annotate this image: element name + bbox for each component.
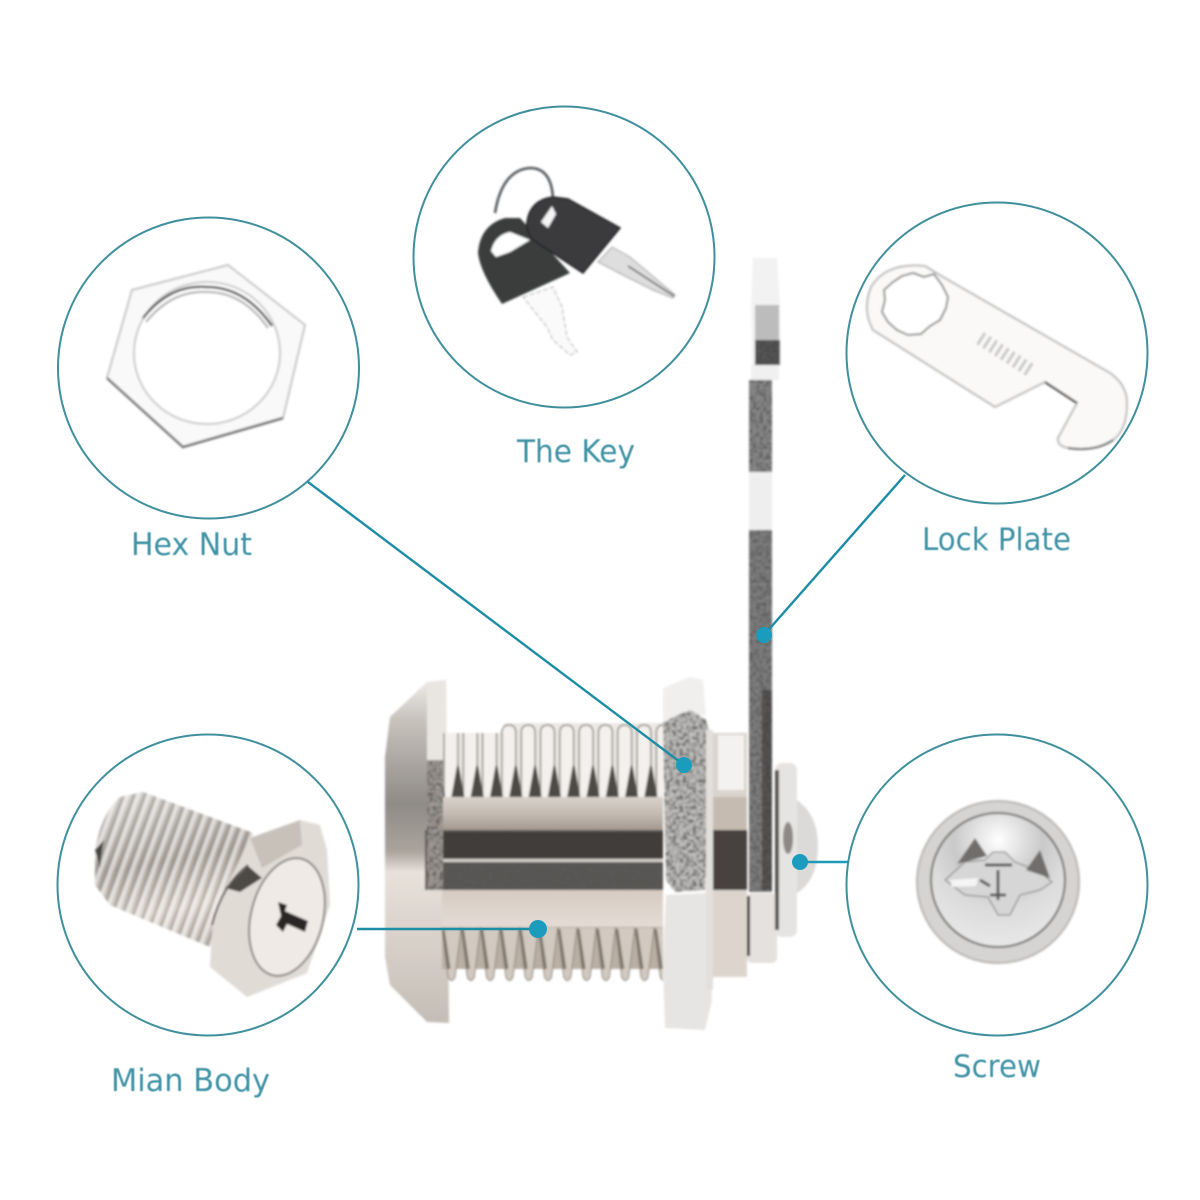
lock plate arm (746, 258, 781, 963)
leader line: hex nut (300, 476, 684, 765)
threads bottom (442, 927, 663, 983)
label: The Key: The Key (516, 434, 635, 470)
icon: lock cylinder (95, 792, 336, 997)
panel: hex nut (58, 218, 359, 518)
label: Hex Nut: Hex Nut (131, 527, 252, 563)
leader line: screw (800, 861, 848, 863)
label: Lock Plate: Lock Plate (922, 522, 1071, 558)
icon: hex nut (107, 265, 305, 447)
hex nut on lock (663, 677, 713, 1030)
flange (385, 680, 449, 1023)
label: Mian Body: Mian Body (111, 1063, 270, 1099)
panel: main body (58, 734, 358, 1036)
washer and screw head (775, 763, 818, 937)
smooth bands (442, 797, 663, 830)
icon: screw head (917, 801, 1079, 963)
leader line: lock plate (764, 475, 905, 635)
spacer (713, 733, 747, 977)
threads top (442, 723, 663, 797)
icon: keys (478, 168, 675, 355)
label: Screw: Screw (953, 1049, 1041, 1085)
leader line: main body (357, 928, 538, 930)
panel: lock plate (846, 202, 1148, 504)
main lock assembly photo (385, 258, 818, 1030)
icon: lock plate (867, 265, 1127, 449)
panel: screw (846, 734, 1148, 1036)
connector dots (529, 627, 808, 938)
panel: the key (414, 106, 714, 408)
